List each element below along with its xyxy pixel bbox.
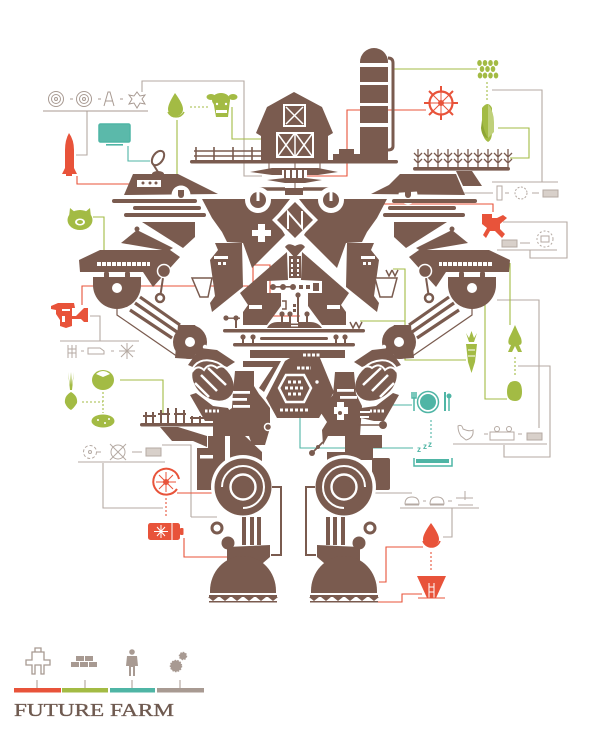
right lower torso block bbox=[309, 372, 387, 460]
legend icon: farmer bbox=[126, 649, 138, 676]
right corn field tray bbox=[413, 149, 512, 186]
barn platform bbox=[190, 160, 398, 164]
mirrored half body: wing, shoulder, arm, fist bbox=[79, 174, 290, 421]
pelvis with honeycomb bbox=[243, 350, 345, 418]
right leg bbox=[306, 455, 390, 602]
icon: rocket bbox=[62, 133, 77, 176]
icon: red sun cycle bbox=[153, 469, 179, 495]
icon: tomato bbox=[92, 370, 114, 390]
satellite dish bbox=[149, 149, 167, 177]
chest cross bbox=[252, 224, 271, 242]
robot body bbox=[79, 48, 512, 602]
mirrored half copy bbox=[299, 174, 510, 421]
barn bbox=[256, 92, 333, 160]
shed bbox=[333, 149, 360, 160]
central diamond emblem bbox=[272, 197, 318, 278]
icon: corn bbox=[481, 104, 494, 142]
icon: process row right top bbox=[492, 182, 558, 200]
wing panel dots left bbox=[137, 180, 161, 187]
torso rails bbox=[223, 329, 365, 346]
fence bbox=[194, 147, 262, 160]
icon: teal sleep z letters and bed bbox=[414, 440, 452, 466]
icon: process row left middle bbox=[60, 341, 139, 359]
right wing extension bbox=[380, 174, 440, 194]
icon: teal sleep z letters and bed: z bbox=[423, 442, 427, 451]
title: FUTURE FARM bbox=[14, 700, 174, 720]
legend icon: gears bbox=[170, 652, 186, 672]
icon: process row right chicken bbox=[453, 425, 547, 444]
saucer under barn bbox=[250, 163, 338, 205]
icon: tv bbox=[99, 124, 130, 146]
right pot with plants bbox=[350, 270, 398, 328]
icon: red bug robot bbox=[482, 214, 507, 238]
icon: red drop bbox=[423, 523, 440, 547]
icon: radish bbox=[65, 372, 77, 410]
icon: red battery bbox=[148, 523, 184, 540]
icon: pig bbox=[68, 208, 92, 230]
icon: process row top left bbox=[43, 92, 148, 111]
left plant tray bbox=[140, 408, 215, 447]
icon: green chicken innards bbox=[508, 325, 522, 352]
icon: carrot bbox=[466, 331, 477, 373]
icon: teal sleep z letters and bed: z bbox=[428, 440, 432, 449]
icon: seeds bbox=[477, 60, 498, 78]
icon: cow bbox=[206, 93, 238, 117]
left leg bbox=[208, 455, 281, 602]
icon: red engine bbox=[51, 303, 88, 328]
legend stems bbox=[37, 680, 180, 688]
legend icon: bricks bbox=[71, 656, 97, 667]
icon: teal plate and cutlery bbox=[412, 392, 452, 412]
connector lines bbox=[76, 69, 567, 602]
torso center components bbox=[223, 283, 322, 328]
icon: green water drop bbox=[168, 93, 184, 117]
left pot bbox=[192, 278, 212, 297]
legend icon: robot bbox=[26, 648, 50, 674]
icon: teal sleep z letters and bed: z bbox=[417, 445, 421, 454]
legend color bar bbox=[14, 688, 204, 692]
icon: red funnel bbox=[417, 576, 446, 598]
silo bbox=[360, 48, 393, 160]
legend icons bbox=[26, 648, 186, 676]
icon: egg bbox=[507, 381, 522, 401]
icon: potato bbox=[92, 414, 114, 428]
icon: ship wheel bbox=[424, 86, 458, 120]
icon: process row right lower bbox=[497, 231, 557, 250]
icon: process row left lower bbox=[78, 444, 165, 462]
icon: process row right leg bbox=[400, 491, 479, 508]
left lower torso block bbox=[197, 371, 272, 490]
